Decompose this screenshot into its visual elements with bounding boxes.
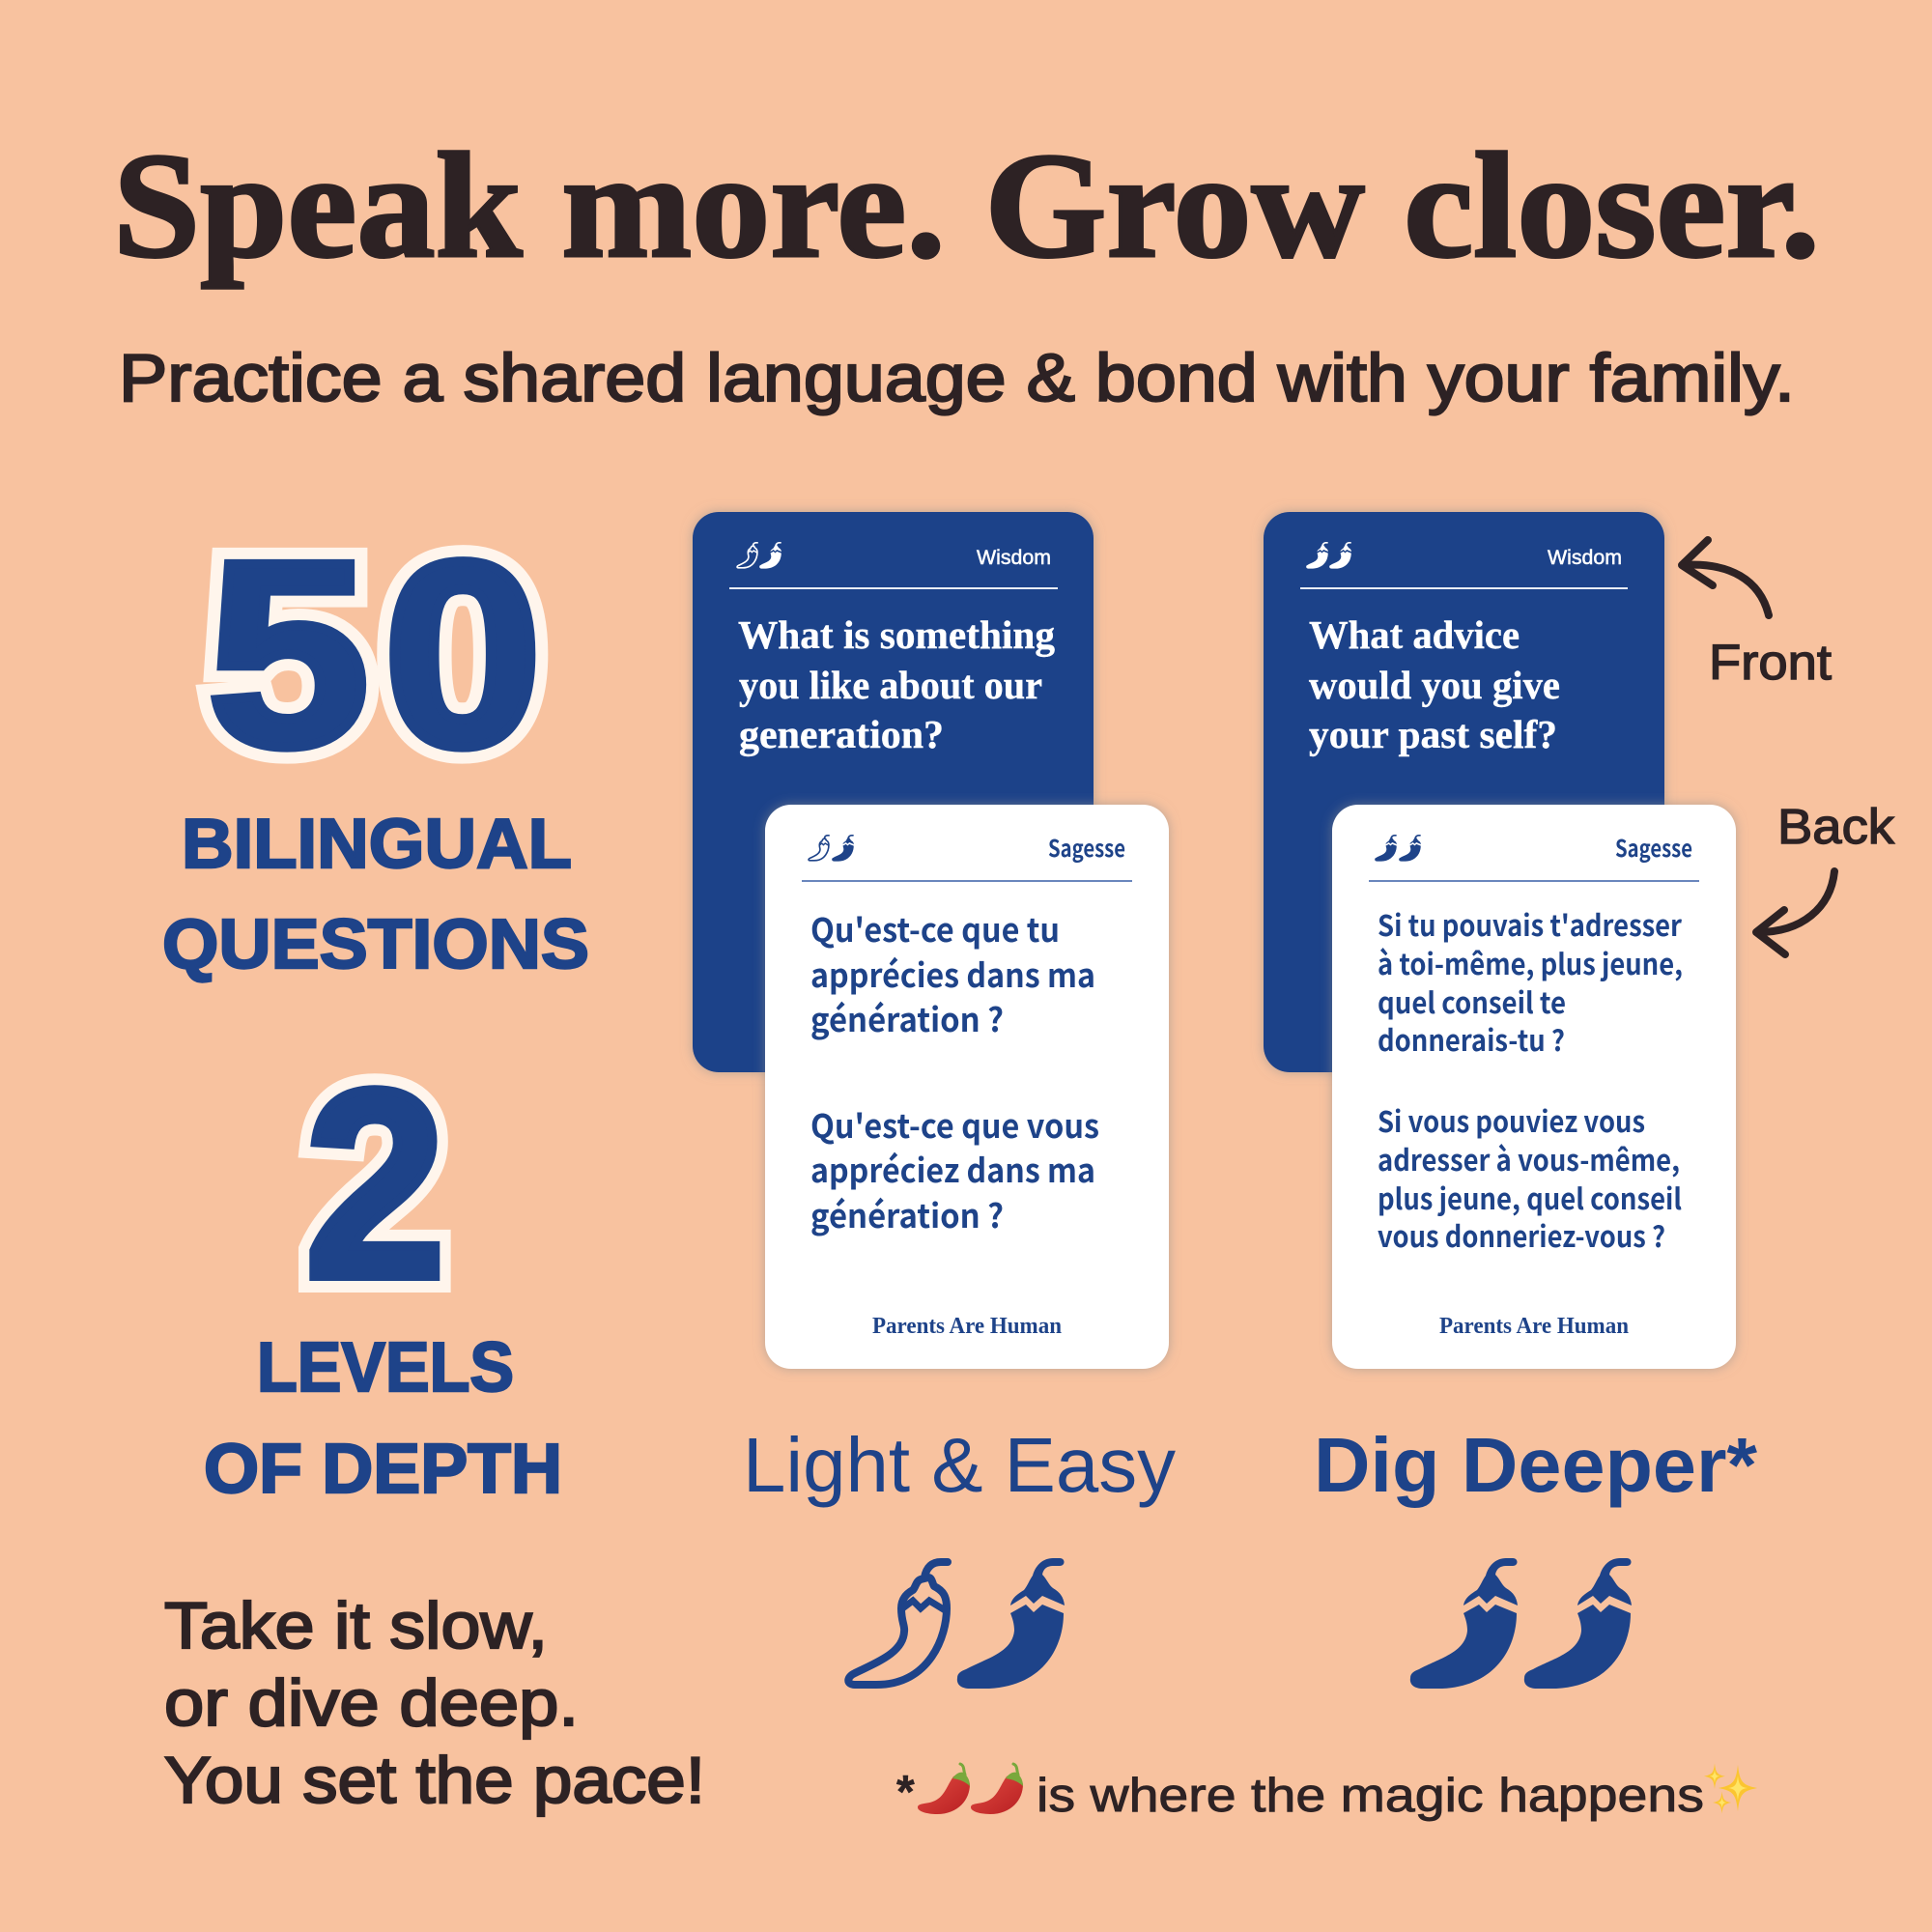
number 2: 2	[305, 1036, 445, 1333]
card front: light: you like about our	[739, 663, 1042, 707]
icon: red chili emoji	[918, 1764, 1023, 1814]
footnote asterisk: *	[896, 1767, 915, 1818]
label of depth: OF DEPTH	[204, 1431, 562, 1508]
card back: deep: adresser à vous-même,	[1378, 1137, 1680, 1179]
card front: light	[693, 512, 1094, 1072]
card back: light: apprécies dans ma	[810, 950, 1095, 997]
label back: Back	[1777, 799, 1895, 854]
card back: light	[765, 805, 1169, 1369]
text block: take it slow	[164, 1589, 705, 1817]
footnote	[896, 1764, 1757, 1822]
number 50: 5	[208, 507, 369, 801]
icon: sparkles	[1704, 1764, 1757, 1814]
card back: light: appréciez dans ma	[810, 1145, 1095, 1192]
card back: light: génération ?	[810, 1190, 1004, 1237]
title: Speak more. Grow closer.	[113, 122, 1820, 289]
card back: deep: vous donneriez-vous ?	[1378, 1213, 1665, 1256]
footnote text: is where the magic happens	[1037, 1770, 1704, 1822]
stat: 50 bilingual questions	[162, 507, 589, 983]
card front: light: Wisdom	[977, 547, 1051, 569]
arrow: front	[1682, 540, 1769, 615]
card back: light: génération ?	[810, 994, 1004, 1041]
label bilingual: BILINGUAL	[182, 806, 572, 883]
card front: deep: would you give	[1309, 663, 1560, 707]
card back: deep: plus jeune, quel conseil	[1378, 1176, 1682, 1218]
label levels: LEVELS	[257, 1329, 514, 1406]
subtitle: Practice a shared language & bond with your family.	[119, 340, 1795, 415]
panel: light and easy cards	[693, 512, 1169, 1369]
card back: light: Qu'est-ce que tu	[810, 904, 1060, 952]
text block: take it slow: You set the pace!	[164, 1744, 705, 1817]
card front: deep: your past self?	[1309, 712, 1557, 756]
arrow: back	[1756, 871, 1834, 954]
card back: light: Parents Are Human	[872, 1314, 1062, 1339]
card back: light: Qu'est-ce que vous	[810, 1100, 1099, 1148]
card back: deep: Si tu pouvais t'adresser	[1378, 902, 1683, 945]
panel: dig deeper cards	[1264, 512, 1736, 1369]
card front: light: generation?	[739, 712, 944, 756]
icon: one outline and one filled chili	[848, 1558, 1065, 1689]
card back: deep: Sagesse	[1615, 830, 1692, 864]
number 50	[208, 507, 542, 801]
number 50: 0	[384, 507, 542, 801]
card front: deep: Wisdom	[1548, 547, 1622, 569]
card back: light: Sagesse	[1048, 830, 1125, 864]
label front: Front	[1709, 635, 1832, 690]
card back: deep: Parents Are Human	[1439, 1314, 1629, 1339]
number 2: 2	[305, 1036, 445, 1333]
heading: dig deeper: Dig Deeper*	[1314, 1422, 1758, 1508]
label questions: QUESTIONS	[162, 906, 589, 983]
card back: deep: à toi-même, plus jeune,	[1378, 941, 1683, 983]
heading: light and easy: Light & Easy	[743, 1422, 1176, 1508]
card front: deep	[1264, 512, 1664, 1072]
card front: deep: What advice	[1309, 612, 1520, 657]
stat: 2 levels of depth	[204, 1036, 562, 1508]
number 50: 0	[384, 507, 542, 801]
text block: take it slow: or dive deep.	[164, 1666, 579, 1740]
text block: take it slow: Take it slow,	[164, 1589, 548, 1662]
card back: deep: donnerais-tu ?	[1378, 1017, 1565, 1060]
number 50: 5	[208, 507, 369, 801]
card back: deep: Si vous pouviez vous	[1378, 1098, 1645, 1141]
card front: light: What is something	[738, 612, 1055, 657]
card back: deep: quel conseil te	[1378, 980, 1566, 1022]
icon: two filled chilis	[1410, 1558, 1632, 1689]
card back: deep	[1332, 805, 1736, 1369]
